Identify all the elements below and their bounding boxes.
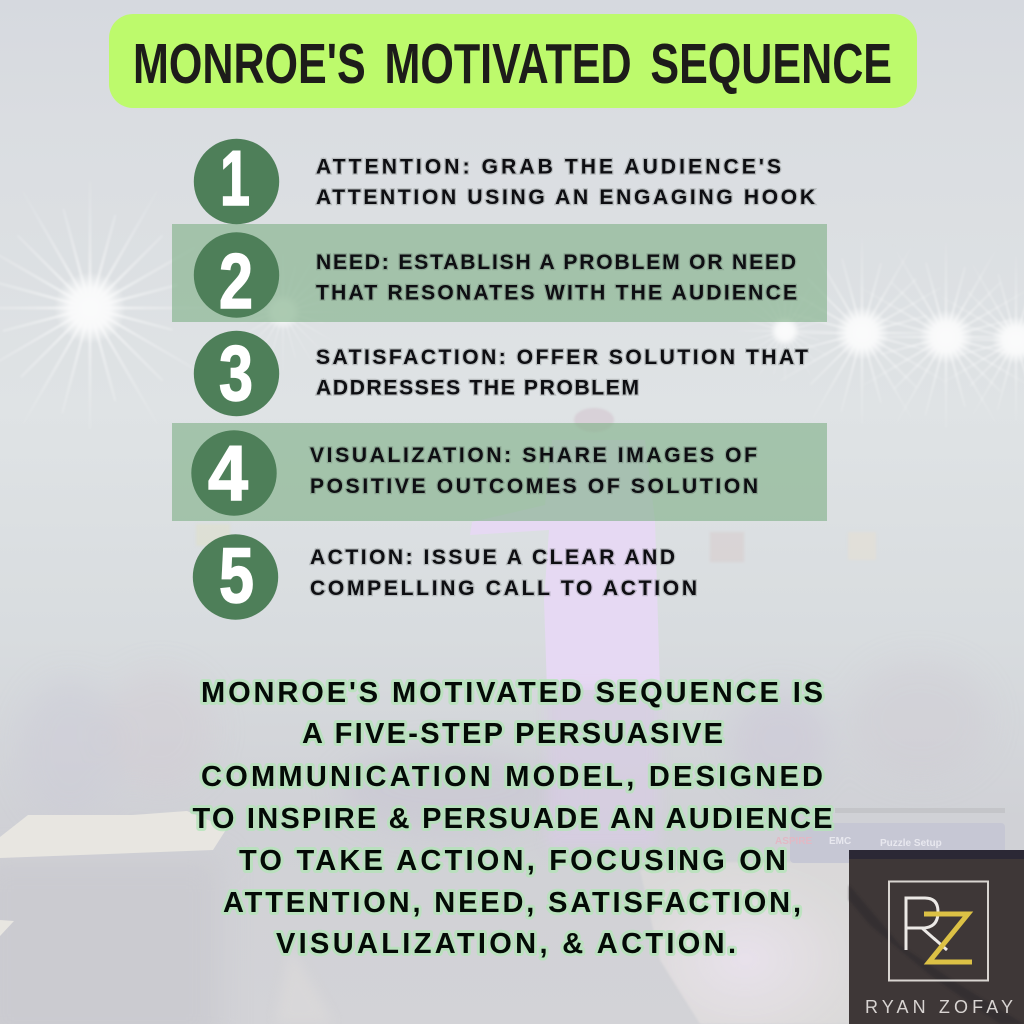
logo letter Z: [924, 914, 972, 962]
summary paragraph: [192, 677, 832, 960]
monitor on stage: EMC: [829, 836, 851, 847]
step 3: [194, 329, 808, 417]
speaker figure: [470, 408, 660, 848]
summary paragraph: COMMUNICATION MODEL, DESIGNED: [201, 761, 823, 793]
logo wordmark: RYAN ZOFAY: [865, 997, 1013, 1017]
monitor on stage: ASPIRE: [775, 836, 813, 847]
summary paragraph: VISUALIZATION, & ACTION.: [276, 928, 736, 960]
stage lights: [0, 178, 1024, 433]
step 3 text: ADDRESSES THE PROBLEM: [316, 376, 639, 400]
step 5 text: [310, 546, 697, 600]
step 2 text: THAT RESONATES WITH THE AUDIENCE: [316, 282, 797, 304]
highlight band: step 2: [172, 224, 827, 322]
monitor on stage: Puzzle Setup: [880, 838, 942, 849]
summary paragraph: TO INSPIRE & PERSUADE AN AUDIENCE: [192, 803, 832, 835]
step 3 text: SATISFACTION: OFFER SOLUTION THAT: [316, 346, 808, 369]
step 5 text: ACTION: ISSUE A CLEAR AND: [310, 546, 675, 569]
step 4 text: [310, 444, 758, 498]
number badge 4: [191, 429, 277, 517]
step 1: [194, 134, 815, 224]
logo square: [889, 882, 988, 980]
number badge 3: [194, 329, 279, 417]
number badge 3: 3: [219, 329, 253, 417]
number badge 1: [194, 134, 279, 224]
summary paragraph: MONROE'S MOTIVATED SEQUENCE IS: [201, 677, 823, 709]
side stage lights: [196, 524, 876, 562]
monitor on stage: [775, 808, 1005, 863]
summary paragraph: A FIVE-STEP PERSUASIVE: [302, 718, 723, 750]
highlight band: step 4: [172, 423, 827, 521]
number badge 5: [193, 531, 278, 620]
step 1 text: ATTENTION USING AN ENGAGING HOOK: [316, 186, 815, 209]
number badge 2: 2: [219, 237, 253, 325]
step 4: [191, 429, 758, 517]
summary paragraph: ATTENTION, NEED, SATISFACTION,: [223, 887, 801, 919]
step 5 text: COMPELLING CALL TO ACTION: [310, 577, 697, 600]
stage floor dark section: [0, 858, 220, 1024]
step 1 text: [316, 156, 815, 209]
step 5: [193, 531, 697, 620]
step 2 text: NEED: ESTABLISH A PROBLEM OR NEED: [316, 251, 796, 274]
step 1 text: ATTENTION: GRAB THE AUDIENCE'S: [316, 156, 781, 178]
step 2 text: [316, 251, 797, 304]
step 2: [194, 232, 797, 325]
number badge 2: [194, 232, 279, 325]
summary paragraph: TO TAKE ACTION, FOCUSING ON: [239, 845, 786, 877]
number badge 5: 5: [219, 531, 254, 619]
title banner: [109, 14, 917, 108]
white platform: [0, 811, 227, 858]
logo block: [849, 850, 1024, 1024]
step 4 text: VISUALIZATION: SHARE IMAGES OF: [310, 444, 757, 467]
number badge 1: 1: [220, 134, 250, 222]
logo letter R: [906, 898, 947, 950]
number badge 4: 4: [208, 429, 248, 517]
lit stage right: [640, 862, 850, 1024]
step 3 text: [316, 346, 808, 400]
step 4 text: POSITIVE OUTCOMES OF SOLUTION: [310, 475, 758, 498]
audience haze: [20, 660, 990, 830]
